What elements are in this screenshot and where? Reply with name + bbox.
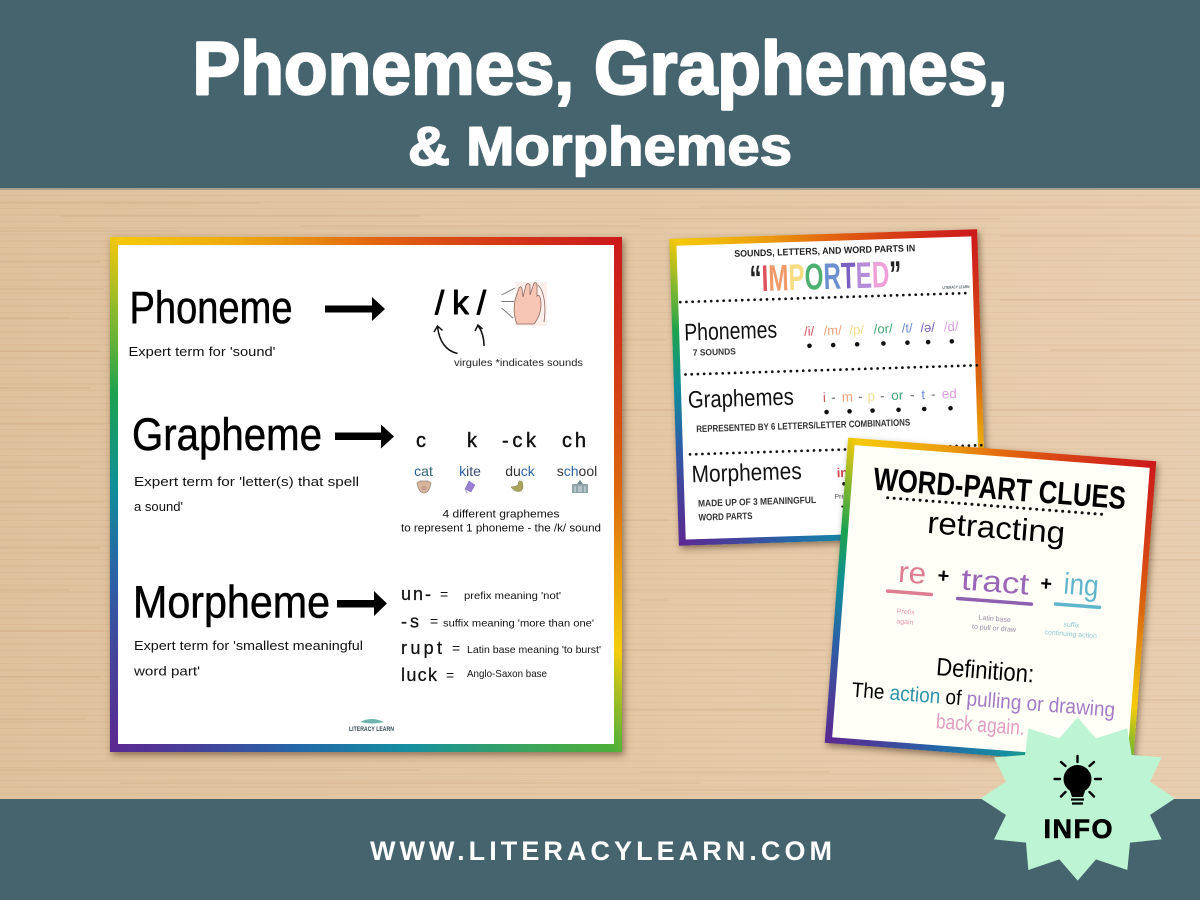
info label: INFO xyxy=(1044,814,1112,844)
grapheme letters: - xyxy=(830,389,835,404)
grapheme letters: m xyxy=(841,389,853,404)
definition heading: Definition: xyxy=(935,653,1035,689)
word part: suffix: suffix xyxy=(1063,621,1080,630)
example word: retracting xyxy=(926,505,1066,550)
title xyxy=(192,26,1008,178)
word part: suffix: continuing action xyxy=(1044,629,1097,640)
morpheme examples: rupt xyxy=(401,638,442,658)
poster heading: SOUNDS, LETTERS, AND WORD PARTS IN xyxy=(734,243,915,259)
word part: prefix: again xyxy=(896,618,913,627)
word part: base: Latin base xyxy=(978,615,1011,624)
word imported in rainbow letters: “IMPORTED” xyxy=(748,253,902,299)
grapheme definition xyxy=(134,475,359,514)
morpheme definition: word part' xyxy=(133,665,200,679)
icon: kite xyxy=(465,481,475,493)
logo: literacy learn xyxy=(349,719,394,733)
morphemes note: WORD PARTS xyxy=(698,510,752,523)
word part: prefix: Prefix xyxy=(896,608,915,617)
logo: literacy learn: LITERACY LEARN xyxy=(349,726,394,733)
icon: pig xyxy=(417,481,431,493)
morpheme heading: Morpheme xyxy=(133,576,330,628)
word part: base: to pull or draw xyxy=(971,624,1017,634)
grapheme definition: Expert term for 'letter(s) that spell xyxy=(134,475,359,489)
morpheme examples: = xyxy=(452,640,460,656)
phonemes note: 7 SOUNDS xyxy=(692,346,735,357)
grapheme letters: c xyxy=(416,430,426,452)
badge starburst xyxy=(981,717,1175,881)
grapheme note: 4 different graphemes xyxy=(442,508,560,520)
grapheme note: to represent 1 phoneme - the /k/ sound xyxy=(401,522,601,534)
example words: kite xyxy=(459,463,481,479)
morphemes heading: Morphemes xyxy=(691,457,802,488)
graphemes row xyxy=(687,378,957,435)
grapheme heading: Grapheme xyxy=(132,409,322,460)
icon: light bulb xyxy=(1054,756,1101,804)
phoneme definition: Expert term for 'sound' xyxy=(128,345,276,359)
icon: duck xyxy=(511,481,523,492)
grapheme note xyxy=(401,508,601,534)
title: Phonemes, Graphemes, xyxy=(192,26,1008,110)
graphemes note: REPRESENTED BY 6 LETTERS/LETTER COMBINATIONS xyxy=(696,417,910,435)
morpheme examples: Latin base meaning 'to burst' xyxy=(467,644,601,656)
phoneme symbols: /ə/ xyxy=(920,319,935,335)
icon: hand at ear xyxy=(502,282,547,326)
grapheme letters: i xyxy=(822,390,826,405)
phonemes row xyxy=(683,310,959,357)
panel: word-part clues poster xyxy=(824,438,1156,766)
example words: duck xyxy=(505,463,536,479)
morpheme examples: Anglo-Saxon base xyxy=(467,668,547,680)
phoneme symbols: /or/ xyxy=(873,320,893,336)
morphemes note xyxy=(697,494,816,523)
arrow: grapheme xyxy=(335,424,394,448)
grapheme letters: p xyxy=(867,388,875,403)
title: & Morphemes xyxy=(408,115,792,177)
morpheme examples xyxy=(401,584,601,685)
arrow: phoneme xyxy=(325,297,385,321)
phoneme symbol: /k/ xyxy=(435,284,487,321)
word part: prefix: re xyxy=(897,556,927,591)
word part: base xyxy=(955,563,1034,635)
grapheme letters: k xyxy=(467,430,478,452)
grapheme dots xyxy=(824,405,952,414)
morpheme examples: un- xyxy=(401,584,431,604)
definition text: back again. xyxy=(935,710,1025,740)
morpheme definition xyxy=(133,639,363,679)
grapheme letters: or xyxy=(891,387,904,403)
phoneme symbols: /t/ xyxy=(901,320,913,335)
morpheme examples: = xyxy=(440,586,448,602)
panel: imported word breakdown poster xyxy=(669,229,986,545)
morpheme examples: suffix meaning 'more than one' xyxy=(443,618,594,630)
prefix hint: Prefix xyxy=(834,493,852,500)
morpheme examples: luck xyxy=(401,665,438,685)
grapheme definition: a sound' xyxy=(134,500,183,514)
grapheme letters: - xyxy=(909,387,914,402)
plus sign: + xyxy=(936,565,950,588)
word part: prefix xyxy=(884,555,934,628)
morpheme definition: Expert term for 'smallest meaningful xyxy=(134,639,363,653)
morphemes note: MADE UP OF 3 MEANINGFUL xyxy=(697,494,816,509)
mini logo: LITERACY LEARN xyxy=(942,284,969,289)
header banner xyxy=(0,0,1200,190)
virgules note: virgules *indicates sounds xyxy=(454,357,583,369)
definition text: The action of pulling or drawing xyxy=(850,679,1115,722)
example words: cat xyxy=(414,463,433,479)
grapheme letters: ed xyxy=(941,385,957,401)
phoneme symbols: /p/ xyxy=(849,321,864,337)
arrow: morpheme xyxy=(337,591,387,616)
word part: suffix: ing xyxy=(1062,568,1099,603)
phoneme heading: Phoneme xyxy=(130,282,292,333)
grapheme letters: - xyxy=(930,386,935,401)
phoneme dots xyxy=(807,338,954,348)
footer banner xyxy=(0,799,1200,900)
morpheme examples: = xyxy=(430,613,438,629)
morpheme examples: prefix meaning 'not' xyxy=(464,590,561,602)
grapheme letters: -ck xyxy=(502,430,537,452)
icon: school xyxy=(572,480,588,493)
definition text xyxy=(849,679,1115,747)
phoneme symbols: /i/ xyxy=(803,323,814,338)
word part: base: tract xyxy=(960,563,1031,602)
grapheme letters: - xyxy=(857,388,862,404)
phonemes heading: Phonemes xyxy=(683,316,777,346)
grapheme letters: - xyxy=(879,388,884,403)
grapheme letters xyxy=(416,430,586,452)
morphemes row xyxy=(691,456,853,523)
phoneme symbols: /d/ xyxy=(943,318,958,334)
phoneme symbols: /m/ xyxy=(823,322,842,338)
graphemes heading: Graphemes xyxy=(687,383,794,413)
example words: school xyxy=(557,463,597,479)
panel: main poster with three definitions xyxy=(110,237,622,752)
phoneme symbols xyxy=(803,318,958,338)
curved arrows to virgules xyxy=(434,325,484,354)
morpheme part hint: in xyxy=(836,464,848,480)
website url: WWW.LITERACYLEARN.COM xyxy=(370,836,832,866)
morpheme examples: -s xyxy=(401,612,419,632)
word part: suffix xyxy=(1044,566,1102,640)
grapheme letters: ch xyxy=(562,430,586,452)
example words xyxy=(414,463,597,479)
morpheme examples: = xyxy=(446,667,454,683)
poster heading: WORD-PART CLUES xyxy=(872,461,1127,516)
grapheme letters: t xyxy=(921,386,925,402)
plus sign: + xyxy=(1039,573,1052,596)
grapheme letters xyxy=(822,385,957,405)
